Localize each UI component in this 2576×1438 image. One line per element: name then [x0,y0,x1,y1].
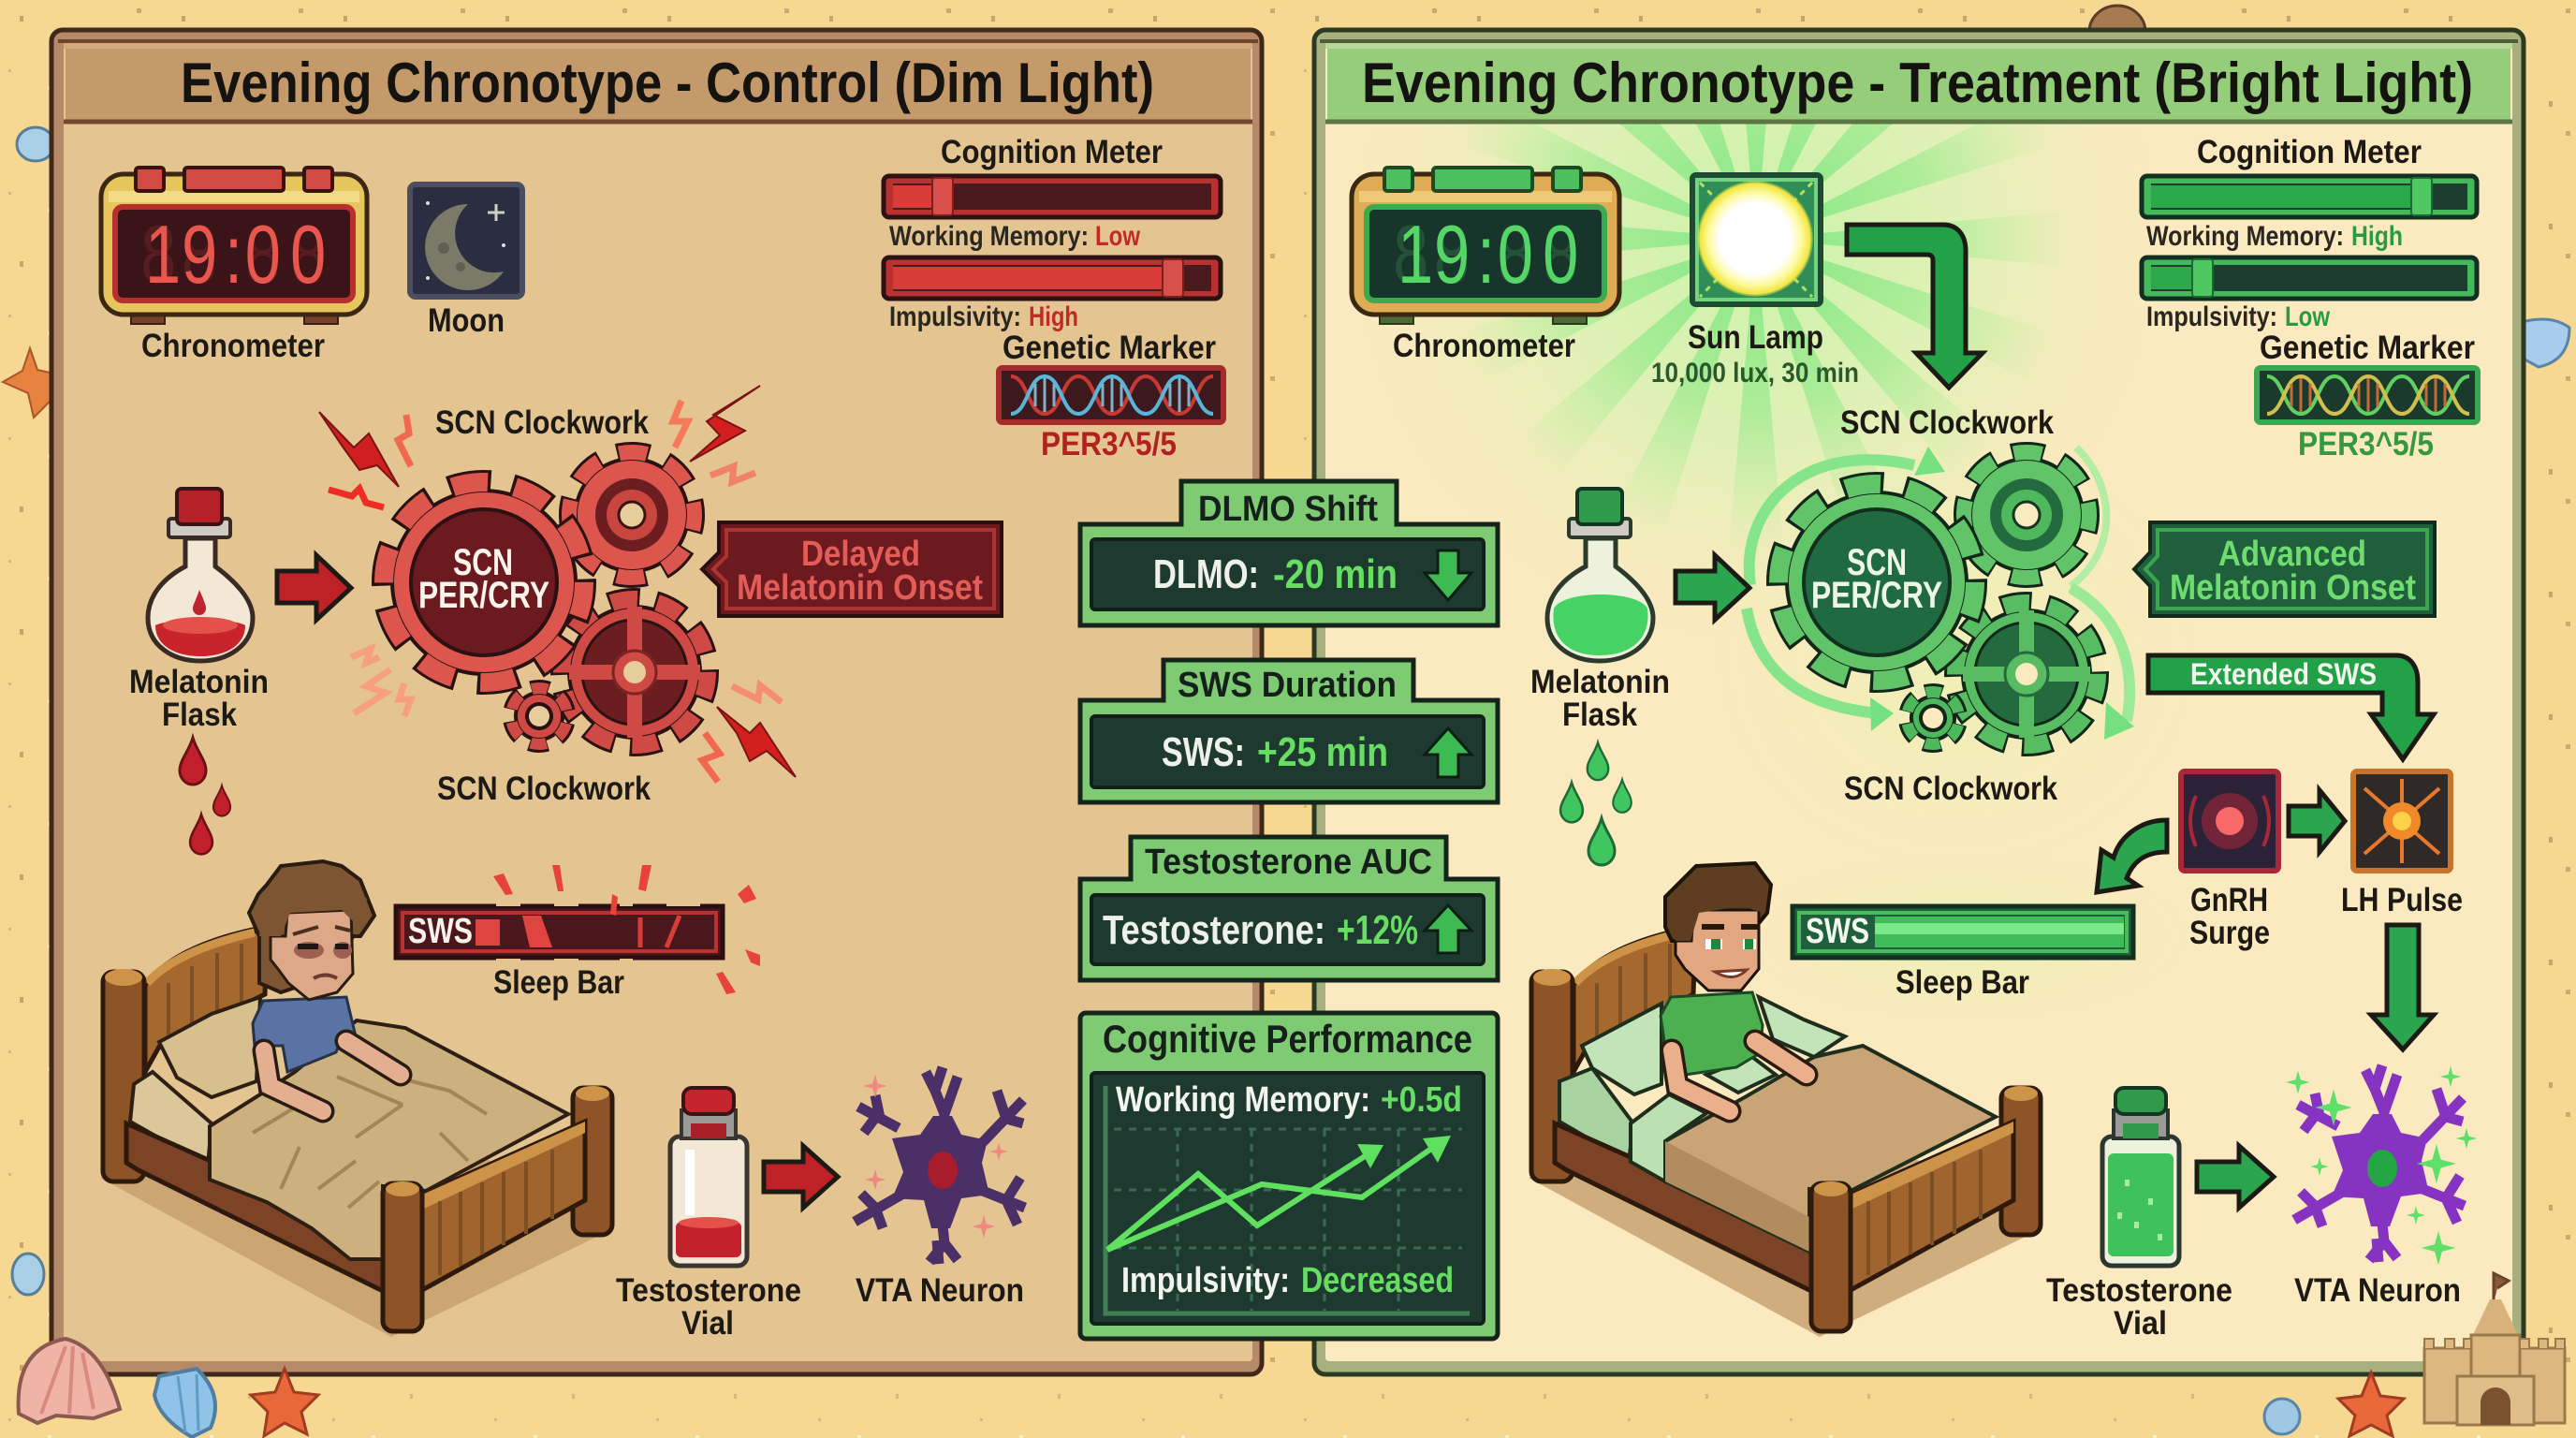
gear: upper right [558,441,706,589]
icon: lightning sparks around control gears [319,386,796,782]
callout: delayed melatonin onset [702,522,1002,616]
decor: right blue shell [2518,319,2569,367]
label: chronometer treatment: Chronometer [1393,328,1575,364]
callout: delayed melatonin onset: Melatonin Onset [737,568,983,608]
icon: sun lamp [1692,175,1821,304]
label: sun lamp: 10,000 lux, 30 min [1651,358,1859,389]
card: testosterone AUC [1080,837,1498,980]
card: cognitive performance [1080,1013,1498,1339]
card: cognitive performance: Impulsivity: [1121,1261,1290,1300]
text: impulsivity high: High [1029,301,1078,332]
gear: main SCN PER/CRY: SCN [453,542,513,583]
arrow: flask to gears treatment [1676,555,1749,620]
icon: dna marker treatment [2257,368,2478,422]
pillow and mattress control [130,997,260,1166]
icon: red gears [358,441,726,764]
icon: full sleep bar: SWS [1806,912,1869,951]
icon: green chronometer clock: 8888 [1393,209,1578,301]
gear: main SCN PER/CRY: SCN [1847,542,1907,583]
icon: GnRH surge [2181,771,2278,871]
callout: advanced melatonin onset: Melatonin Onset [2170,568,2416,608]
card: cognitive performance: Working Memory: [1116,1080,1370,1120]
label: sleep bar treatment: Sleep Bar [1895,964,2029,1001]
label: testosterone vial treatment [2046,1272,2232,1342]
arrow: vial to neuron treatment [2197,1146,2274,1208]
rock behind right panel [2089,6,2145,58]
arrow: extended SWS banner: Extended SWS [2190,657,2377,691]
text: working memory low: Low [1095,221,1141,252]
icon: green chronometer clock [1352,168,1619,324]
card: cognitive performance: Cognitive Performance [1103,1017,1472,1061]
arrow: flask to gears control [277,555,351,620]
label: scn clockwork top treatment: SCN Clockwork [1840,404,2054,441]
icon: red melatonin drops [180,738,230,854]
card: DLMO shift: -20 min [1273,551,1398,597]
hair back [249,861,374,992]
gear: main SCN PER/CRY [1753,459,2000,706]
icon: red chronometer clock [101,168,367,324]
icon: melatonin flask treatment [1547,489,1653,661]
card: DLMO shift [1080,481,1498,625]
bed front post over blanket [383,1181,422,1331]
callout: delayed melatonin onset: Delayed [801,535,920,574]
card: DLMO shift: DLMO Shift [1198,490,1378,529]
label: VTA neuron control: VTA Neuron [856,1272,1024,1309]
label: testosterone vial treatment: Testosterone [2046,1272,2232,1309]
decor: left starfish [3,348,58,418]
label: scn clockwork bottom control: SCN Clockwork [437,770,651,807]
decor: starfish [251,1369,318,1436]
bed: treatment [1529,930,2042,1337]
character: tired man in bed [249,861,401,1111]
arrow: LH pulse to neuron [2371,925,2434,1049]
icon: melatonin flask control [148,489,253,661]
label: sun lamp [1651,319,1859,389]
card: SWS duration [1080,660,1498,802]
callout: advanced melatonin onset [2134,522,2435,616]
decor: lower left pebble [12,1254,44,1295]
label: testosterone vial control: Vial [681,1305,734,1342]
icon: sleep bar sparks [493,865,760,994]
label: genetic marker control: Genetic Marker [1003,330,1216,366]
tired face [271,910,353,1000]
label: GnRH surge [2189,882,2270,951]
card: SWS duration: SWS Duration [1178,666,1397,705]
green sheet folds [1631,1057,1776,1181]
gear: lower right [543,580,726,764]
decor: starfish right [2338,1372,2404,1436]
text: working memory low: Working Memory: [889,221,1089,252]
sun lamp glow and rays [1354,0,2200,1020]
icon: testosterone vial control [670,1088,747,1266]
arrow: vial to neuron control [764,1146,838,1208]
card: SWS duration: SWS: [1162,729,1245,775]
label: melatonin flask treatment: Flask [1562,697,1637,733]
meter: working memory low [884,176,1221,217]
meter: impulsivity low [2142,257,2477,299]
label: GnRH surge: Surge [2189,915,2270,951]
text: impulsivity low: Low [2285,301,2331,332]
label: melatonin flask control: Flask [162,697,237,733]
icon: testosterone vial treatment [2102,1088,2179,1266]
bed front post over blanket [1811,1181,1851,1331]
label: sun lamp: Sun Lamp [1688,319,1823,356]
pillow and green sheets [1559,997,1845,1162]
callout: advanced melatonin onset: Advanced [2218,535,2366,574]
arrow: LH to GnRH [2289,790,2345,852]
gear: main SCN PER/CRY: PER/CRY [418,575,549,616]
text: working memory high: High [2351,221,2403,252]
green shirt [1661,992,1763,1075]
text: working memory high: Working Memory: [2146,221,2344,252]
gear: small [1901,686,1965,750]
icon: green melatonin drops [1560,742,1632,865]
label: PER3 genotype treatment: PER3^5/5 [2298,426,2434,462]
decor: left blue pebble [17,127,54,161]
arms [1672,1041,1807,1111]
icon: green gears [1753,441,2116,764]
card: cognitive performance: +0.5d [1381,1080,1462,1120]
text: impulsivity high: Impulsivity: [889,301,1021,332]
decor: pebble [2264,1399,2300,1434]
label: melatonin flask treatment [1530,664,1670,733]
arms [264,1041,401,1111]
bed: control [100,930,614,1337]
label: VTA neuron treatment: VTA Neuron [2294,1272,2461,1309]
arrow: extended SWS banner [2148,655,2434,759]
chart: working memory and impulsivity lines [1105,1086,1470,1313]
icon: red chronometer clock: 8888 [140,209,326,301]
arrow: sun lamp to clockwork [1847,225,1983,388]
label: sleep bar control: Sleep Bar [493,964,624,1001]
icon: VTA neuron control [855,1067,1025,1264]
control panel header band [66,49,1251,120]
icon: broken sleep bar control: SWS [408,912,473,951]
decor: pink shell [19,1339,120,1423]
label: melatonin flask control [129,664,269,733]
label: genetic marker treatment: Genetic Marker [2260,330,2475,366]
icon: LH pulse [2353,771,2451,871]
icon: full sleep bar [1793,906,2133,958]
title: control: Evening Chronotype - Control (Dim Light) [181,51,1154,114]
text: impulsivity low: Impulsivity: [2146,301,2277,332]
label: testosterone vial control [616,1272,801,1342]
gear: lower right [1937,584,2116,764]
blue shirt [253,997,355,1072]
card: testosterone AUC: +12% [1337,907,1418,953]
label: melatonin flask treatment: Melatonin [1530,664,1670,700]
card: testosterone AUC: Testosterone AUC [1145,843,1432,882]
label: scn clockwork top control: SCN Clockwork [435,404,649,441]
gear: small [505,682,574,751]
icon: moon [410,184,522,297]
label: cognition meter control: Cognition Meter [941,134,1163,170]
label: PER3 genotype control: PER3^5/5 [1041,426,1177,462]
gear: main SCN PER/CRY: PER/CRY [1811,575,1942,616]
decor: sand castle [2424,1273,2565,1425]
icon: green chronometer clock: 19:00 [1398,209,1578,301]
card: SWS duration: +25 min [1257,729,1388,775]
label: cognition meter treatment: Cognition Meter [2197,134,2422,170]
card: testosterone AUC: Testosterone: [1103,907,1325,953]
card: cognitive performance: Decreased [1301,1261,1454,1300]
label: testosterone vial control: Testosterone [616,1272,801,1309]
title: treatment: Evening Chronotype - Treatment (Bright Light) [1362,51,2473,114]
icon: VTA neuron treatment [2286,1065,2477,1265]
label: chronometer: Chronometer [141,328,325,364]
label: scn clockwork bottom treatment: SCN Clockwork [1844,770,2057,807]
gear: main SCN PER/CRY [358,456,610,709]
label: testosterone vial treatment: Vial [2114,1305,2167,1342]
decor: blue shell [154,1369,215,1437]
panel: control (dim light) [51,30,1262,1374]
meter: impulsivity high [884,257,1221,299]
character: rested man in bed [1661,863,1807,1111]
meter: working memory high [2142,176,2477,217]
label: LH pulse: LH Pulse [2341,882,2463,918]
icon: red chronometer clock: 19:00 [145,209,326,301]
icon: green rotation arrows [1747,447,2134,740]
label: melatonin flask control: Melatonin [129,664,269,700]
panel: treatment (bright light) [1314,30,2524,1374]
icon: dna marker control [999,368,1223,422]
gear: upper right [1953,441,2100,589]
tan blanket treatment [1665,1046,1996,1252]
label: moon: Moon [428,302,505,339]
card: DLMO shift: DLMO: [1153,551,1259,597]
icon: broken sleep bar control [396,897,723,968]
label: GnRH surge: GnRH [2190,882,2268,918]
rumpled blanket control [210,1020,568,1259]
arrow: gnrh to sleep bar [2097,820,2167,892]
smiling face [1676,910,1759,990]
treatment panel header band [1320,41,2518,122]
